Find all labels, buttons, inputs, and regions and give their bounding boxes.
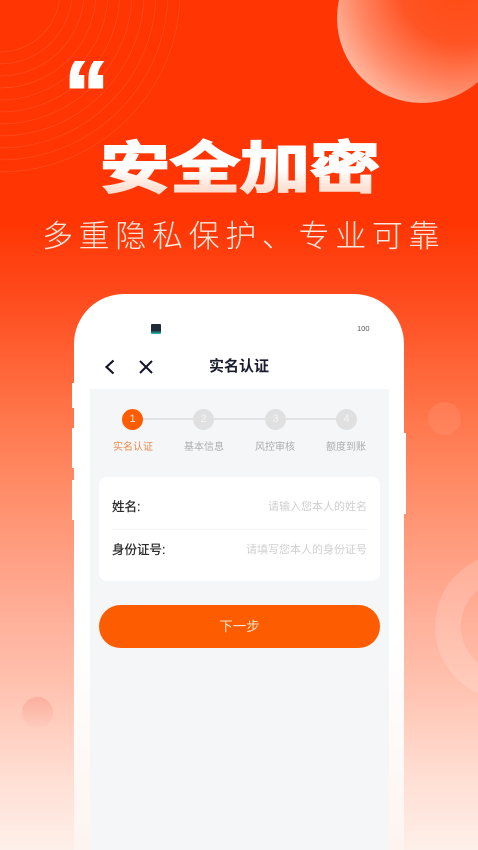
step label 1: 实名认证 bbox=[113, 442, 153, 453]
step 3: 3 bbox=[272, 413, 279, 425]
name label: 姓名: bbox=[112, 500, 140, 514]
status icon bbox=[151, 324, 161, 334]
back icon bbox=[105, 360, 114, 374]
step 3 bbox=[265, 409, 286, 430]
next button bbox=[99, 605, 380, 648]
step label 2: 基本信息 bbox=[184, 442, 224, 453]
step 1 bbox=[122, 409, 143, 430]
name placeholder: 请输入您本人的姓名 bbox=[268, 501, 367, 513]
step label 3: 风控审核 bbox=[255, 442, 295, 453]
title: 安全加密 bbox=[100, 139, 380, 200]
form card bbox=[99, 477, 380, 581]
id placeholder: 请填写您本人的身份证号 bbox=[246, 544, 367, 556]
nav title: 实名认证 bbox=[209, 358, 269, 375]
step line bbox=[132, 418, 346, 420]
step 2: 2 bbox=[200, 413, 207, 425]
step 4 bbox=[336, 409, 357, 430]
screen panel bbox=[90, 389, 389, 850]
close icon bbox=[139, 360, 153, 374]
step 1: 1 bbox=[129, 413, 136, 425]
id label: 身份证号: bbox=[112, 543, 165, 557]
step 4: 4 bbox=[343, 413, 350, 425]
subtitle: 多重隐私保护、专业可靠 bbox=[42, 219, 445, 254]
status battery: 100 bbox=[357, 324, 370, 333]
field divider bbox=[112, 529, 367, 530]
background arcs bbox=[0, 0, 180, 172]
step 2 bbox=[193, 409, 214, 430]
quote mark icon: “ bbox=[64, 44, 109, 144]
step tracker bbox=[143, 418, 336, 420]
next button: 下一步 bbox=[219, 619, 260, 634]
decorative sphere bbox=[337, 0, 478, 103]
phone side buttons bbox=[72, 383, 406, 520]
small circle right bbox=[428, 402, 461, 435]
step label 4: 额度到账 bbox=[326, 442, 366, 453]
ring right bbox=[435, 553, 478, 700]
small circle left bbox=[22, 697, 53, 728]
phone bbox=[74, 294, 404, 850]
